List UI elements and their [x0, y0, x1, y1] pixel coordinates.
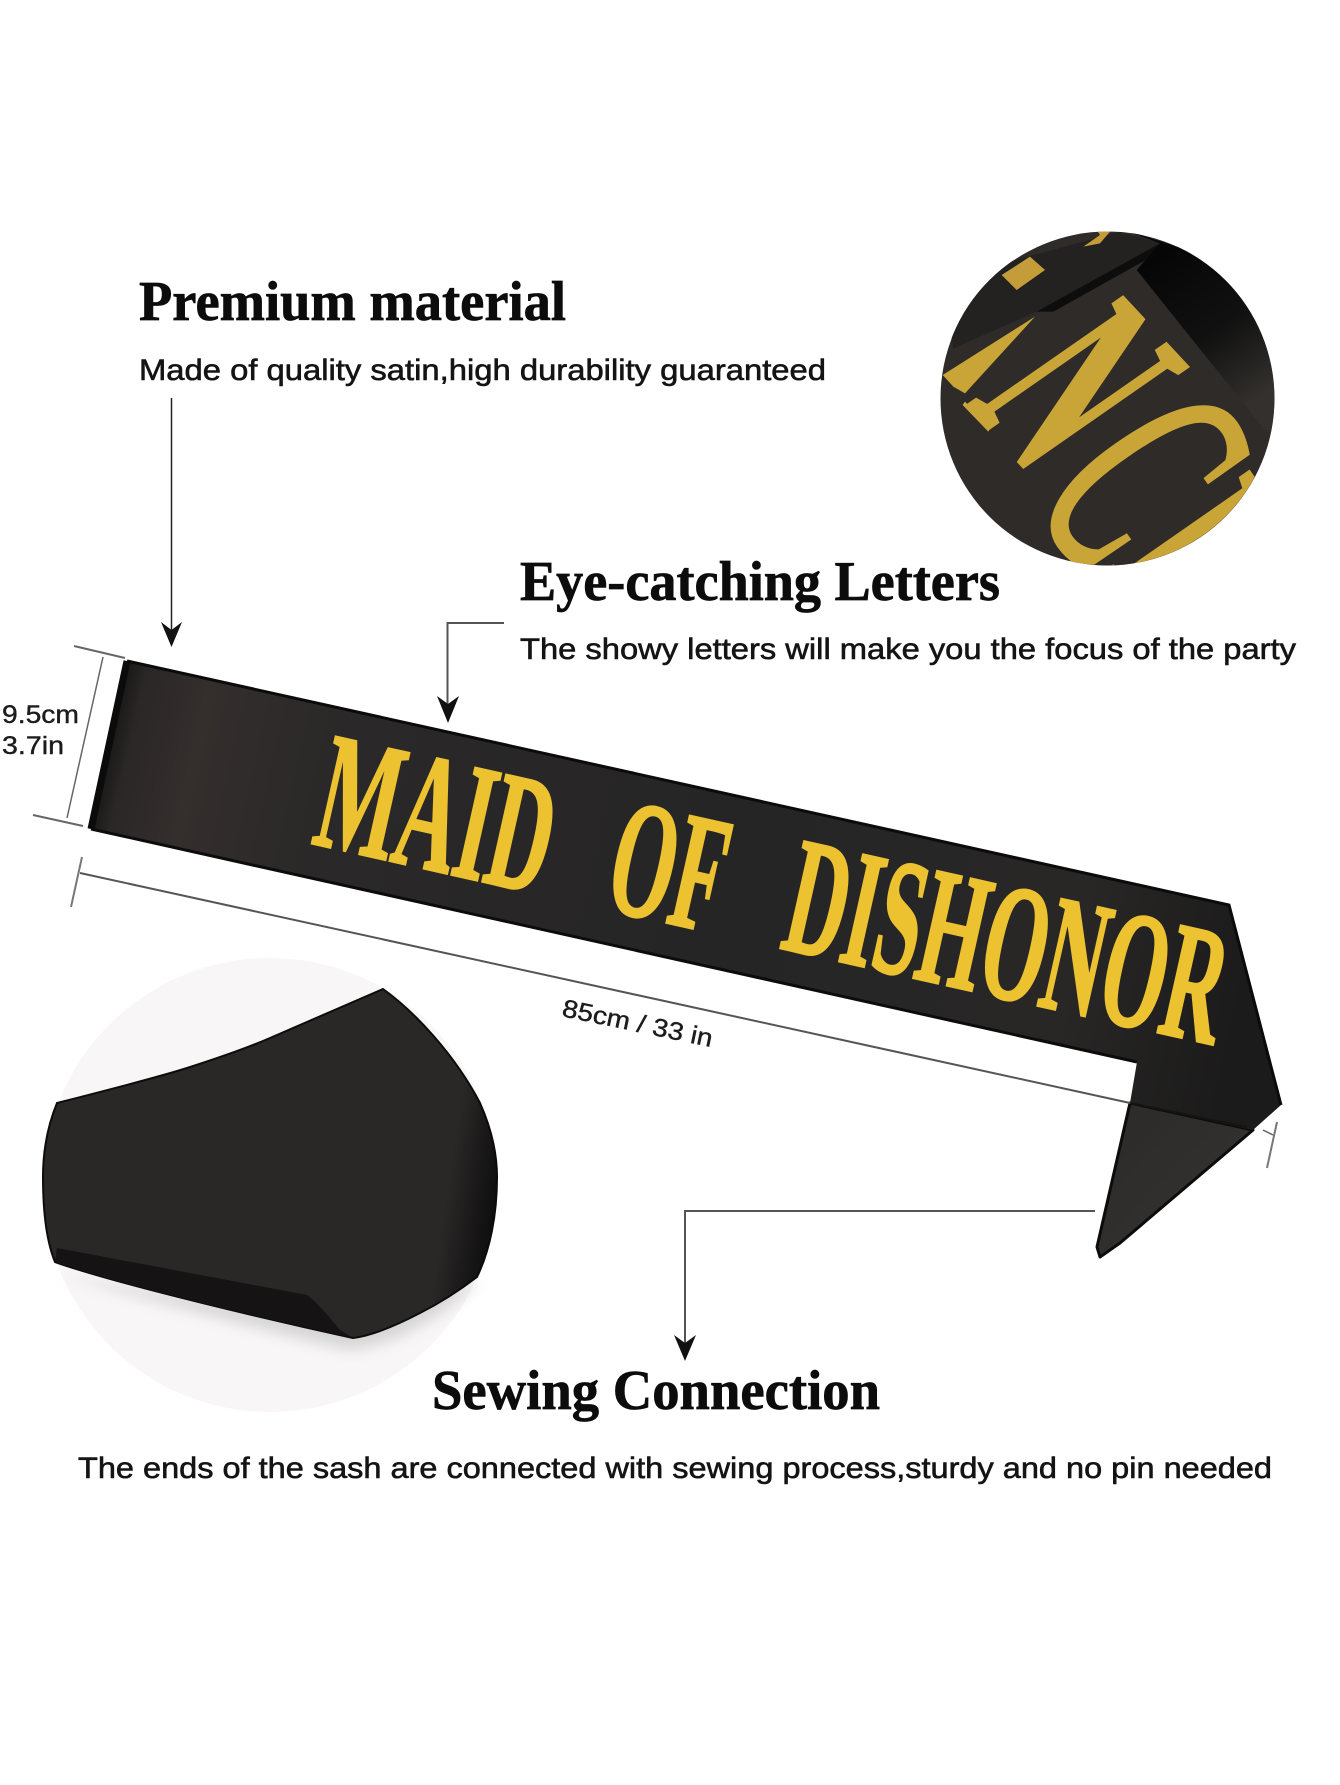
text: sewing description: The ends of the sash are connected with sewing process,sturdy and no pin needed	[78, 1452, 1272, 1485]
sash fold shadow line	[1130, 1103, 1247, 1127]
sash wording: MAID OF DISHONOR: MAID	[302, 699, 573, 931]
shadow beneath sewn end	[60, 1275, 480, 1350]
infographic canvas	[2, 231, 1296, 1484]
sash main body	[91, 661, 1281, 1130]
arrow: sash end to sewing connection	[674, 1211, 1095, 1361]
sash lower edge	[91, 829, 1137, 1062]
detail circle: sewn sash end	[43, 958, 497, 1412]
sash left edge	[91, 661, 127, 829]
text: premium material description: Made of quality satin,high durability guaranteed	[139, 354, 826, 387]
sash wording: MAID OF DISHONOR: OF	[594, 764, 745, 969]
letter close-up contents: C	[974, 337, 1317, 618]
arrow: premium material to sash	[161, 398, 182, 647]
dimension: sash length: 85cm / 33 in	[560, 994, 715, 1053]
letter close-up contents	[942, 231, 1274, 566]
sash: black satin band	[91, 661, 1281, 1257]
letter close-up contents: N	[913, 257, 1244, 513]
sewn seam fold band	[55, 1248, 353, 1338]
dimension: sash width	[2, 646, 125, 826]
arrow: letters to sash	[437, 623, 504, 723]
dimension: sash width: 3.7in	[2, 732, 64, 760]
sash wording: MAID OF DISHONOR	[302, 699, 1246, 1081]
dimension: sash length	[71, 857, 1277, 1168]
dimension: sash width: 9.5cm	[2, 701, 79, 729]
sash tail below fold	[1097, 1103, 1253, 1257]
sewn sash end shape	[43, 989, 497, 1338]
text: letters description: The showy letters will make you the focus of the party	[520, 633, 1296, 666]
detail circle: glitter letters	[940, 231, 1274, 566]
heading: Premium material: Premium material	[139, 271, 566, 333]
heading: Sewing Connection: Sewing Connection	[432, 1360, 880, 1422]
sash top edge	[127, 661, 1281, 1105]
heading: Eye-catching Letters: Eye-catching Letters	[520, 551, 1000, 613]
